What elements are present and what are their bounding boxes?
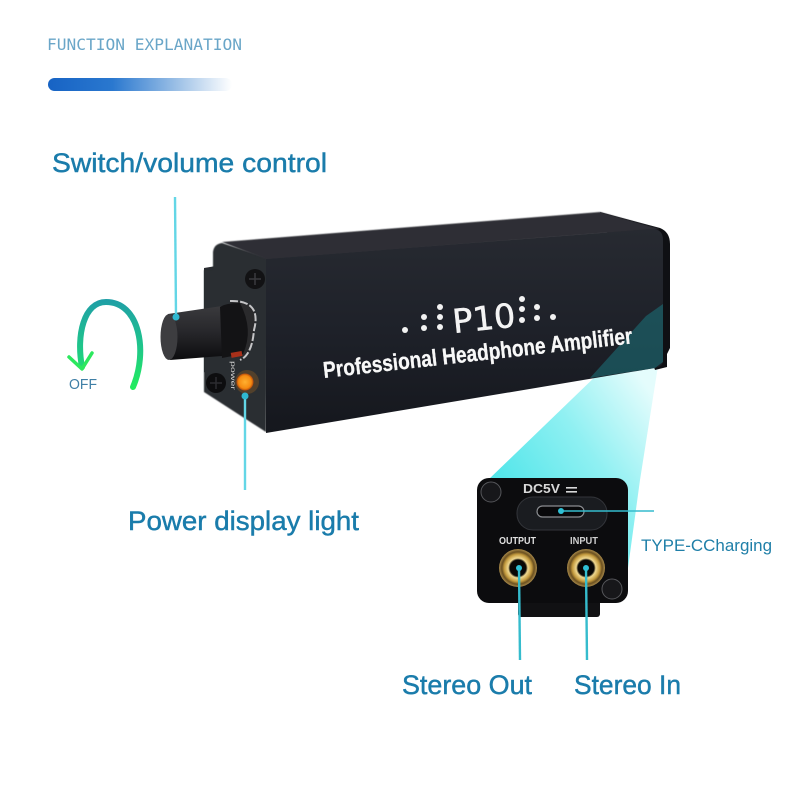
INPUT label: INPUT: [570, 536, 598, 547]
label: stereo in: Stereo In: [574, 670, 681, 700]
amplifier rear flange: [204, 266, 216, 380]
leader line: stereo out: [516, 565, 522, 660]
orange power LED: [235, 370, 259, 394]
OUTPUT label: OUTPUT: [499, 536, 536, 547]
product name: Professional Headphone Amplifier: [322, 322, 634, 383]
potentiometer ring: [230, 301, 256, 360]
DC5V label: DC5V: [523, 481, 560, 496]
amplifier right cap: [600, 212, 670, 370]
P10 logo: P10: [450, 296, 517, 341]
lower end screw: [206, 373, 226, 393]
amplifier top face: [222, 212, 660, 260]
knob red accent: [231, 351, 242, 358]
P10 dots left: [402, 304, 443, 333]
panel body: [477, 478, 628, 603]
USB-C port: [537, 506, 584, 517]
port panel detail: [477, 478, 628, 617]
amplifier front face: [266, 229, 663, 433]
DC symbol: [566, 487, 577, 493]
label: type-c charging: TYPE-CCharging: [641, 536, 772, 555]
beam overlay on front face: [590, 304, 663, 378]
upper end screw: [245, 269, 265, 289]
bottom-right panel screw: [602, 579, 622, 599]
leader line: type-c: [558, 508, 654, 514]
amplifier end plate: [204, 243, 268, 432]
heading: power display light: Power display light: [128, 506, 359, 536]
OFF label: OFF: [69, 376, 97, 393]
input jack: [567, 549, 605, 587]
USB-C recess: [517, 497, 607, 530]
heading: switch/volume control: Switch/volume control: [52, 148, 327, 178]
title: FUNCTION EXPLANATION: [47, 35, 242, 54]
rotation arrow: [69, 302, 140, 387]
label: stereo out: Stereo Out: [402, 670, 532, 700]
cyan projection beam: [488, 366, 658, 590]
top-left panel screw: [481, 482, 501, 502]
output jack: [499, 549, 537, 587]
leader line: stereo in: [583, 565, 589, 660]
leader line: volume: [172, 197, 180, 320]
panel tab: [518, 590, 600, 617]
leader line: power light: [242, 392, 248, 490]
title accent bar: [48, 78, 232, 91]
vertical power label: power: [229, 361, 236, 391]
volume knob: [160, 303, 248, 360]
amplifier product: [160, 212, 670, 433]
P10 dots right: [519, 296, 556, 323]
